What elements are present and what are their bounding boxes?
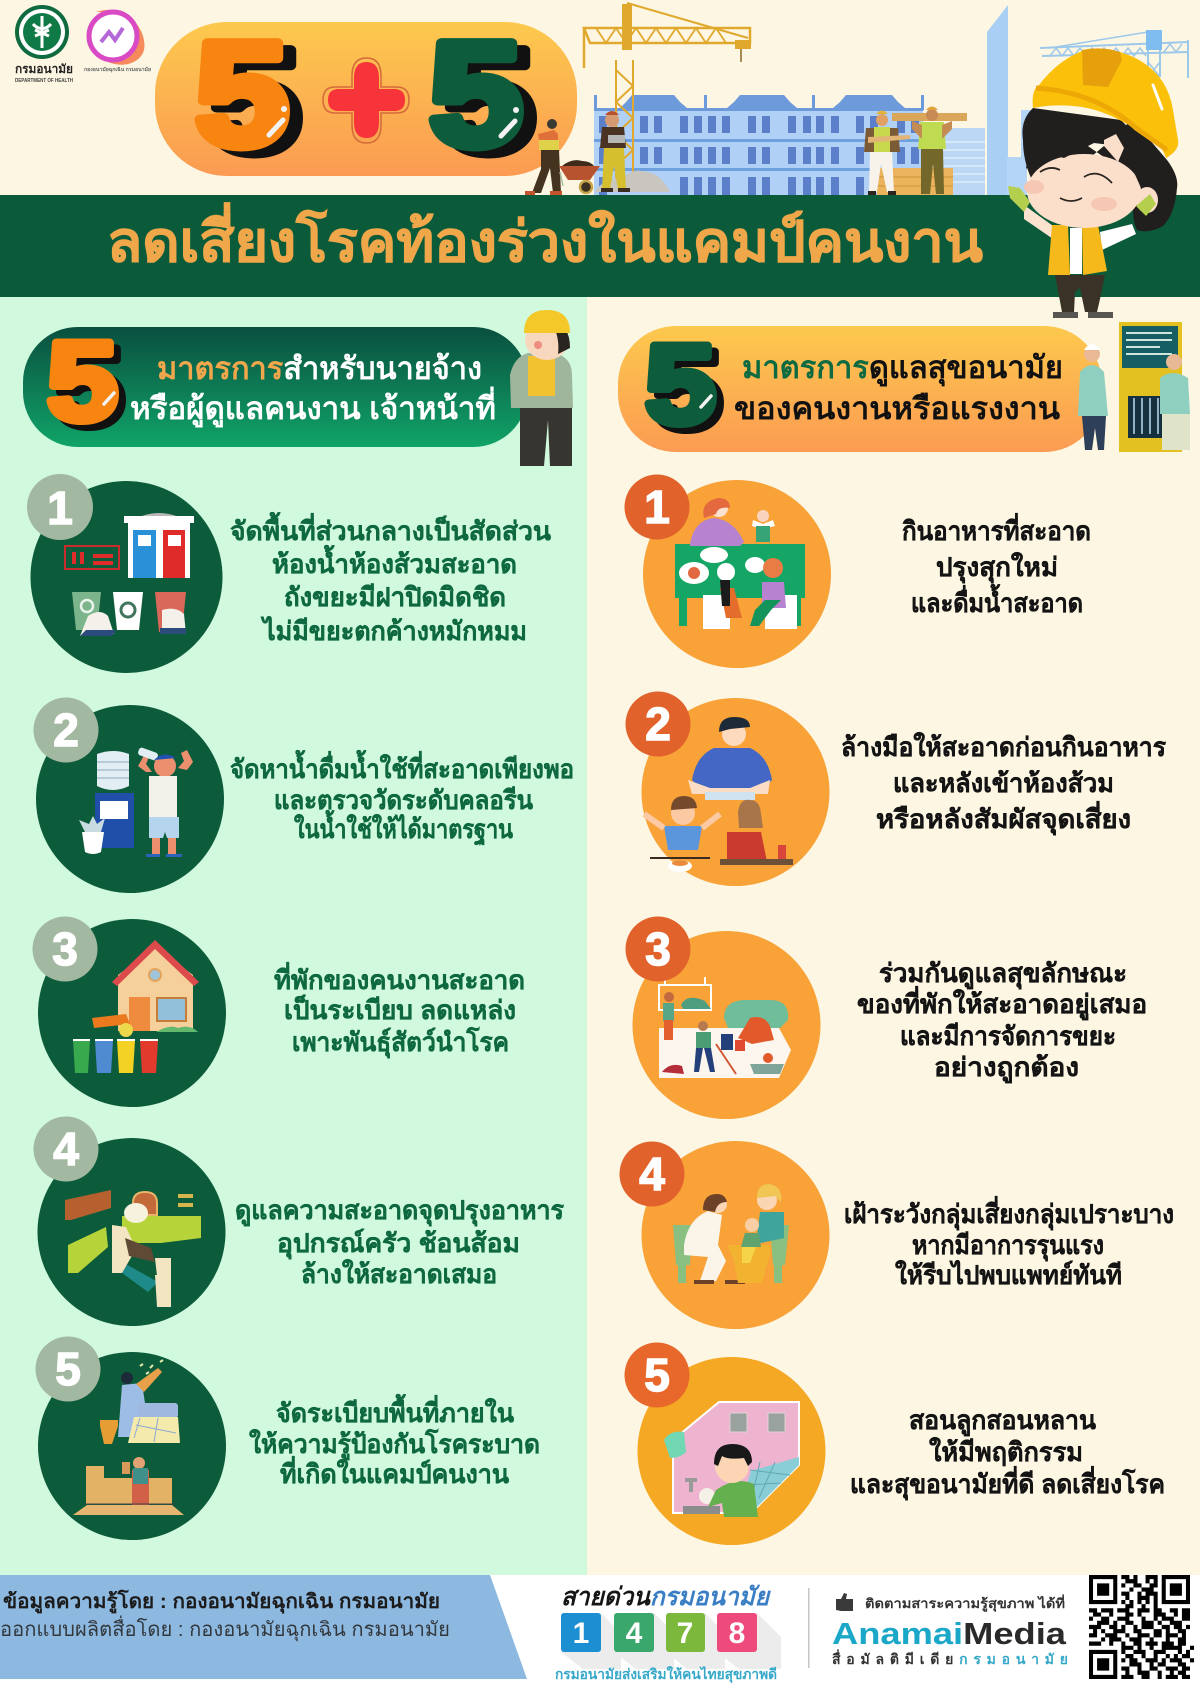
large orange 5: 5 xyxy=(47,319,118,444)
AnamaiMedia brand: สื่อมัลติมีเดีย กรมอนามัย xyxy=(832,1649,1068,1667)
text 3: ร่วมกันดูแลสุขลักษณะ xyxy=(879,958,1127,990)
big orange 5: 5 xyxy=(208,19,302,184)
text 4: อุปกรณ์ครัว ช้อนส้อม xyxy=(277,1228,520,1260)
item 1 xyxy=(27,474,551,673)
heading text: มาตรการสำหรับนายจ้าง xyxy=(157,351,482,386)
icon: doctor with mother and child xyxy=(673,1184,789,1284)
right light crane xyxy=(1040,30,1188,78)
text 2: และตรวจวัดระดับคลอรีน xyxy=(274,785,533,815)
panel: right column measures xyxy=(620,474,1174,1545)
footer xyxy=(0,1575,1194,1683)
text 4 xyxy=(844,1195,1174,1290)
panel heading: left column xyxy=(23,319,528,450)
heading text xyxy=(734,350,1063,426)
badge 5 xyxy=(36,1336,100,1402)
text 4: ให้รีบไปพบแพทย์ทันที xyxy=(895,1259,1122,1290)
hotline 1478: สายด่วนกรมอนามัย xyxy=(561,1583,771,1611)
item 5 xyxy=(36,1336,540,1540)
text 1: ห้องน้ำห้องส้วมสะอาด xyxy=(272,544,517,579)
badge 4: 4 xyxy=(639,1148,665,1200)
AnamaiMedia brand: ติดตามสาระความรู้สุขภาพ ได้ที่ xyxy=(865,1594,1065,1612)
text 4: หากมีอาการรุนแรง xyxy=(912,1230,1104,1262)
badge 2: 2 xyxy=(645,698,671,750)
text 4 xyxy=(235,1195,564,1289)
text 3 xyxy=(274,961,525,1059)
item 3 xyxy=(32,916,525,1107)
item 3 xyxy=(626,916,1147,1119)
text 5: และสุขอนามัยที่ดี ลดเสี่ยงโรค xyxy=(850,1465,1165,1501)
big green 5: 5 xyxy=(442,19,536,184)
badge 4 xyxy=(620,1142,684,1206)
badge 1 xyxy=(27,474,93,540)
pill: 5+5 headline xyxy=(155,12,577,184)
text 5: ที่เกิดในแคมป์คนงาน xyxy=(280,1455,509,1489)
background: construction scene xyxy=(584,3,1188,196)
text 1 xyxy=(230,511,551,646)
gloves xyxy=(1008,186,1030,212)
hotline 1478: 7 xyxy=(677,1617,693,1650)
small right block xyxy=(1007,110,1035,195)
panel heading: right column xyxy=(618,322,1102,453)
big character in hard hat xyxy=(1008,48,1178,318)
text 3 xyxy=(857,958,1147,1084)
icon: kitchen with chefs xyxy=(65,1190,201,1307)
plus sign xyxy=(323,58,409,143)
logo: Department of Health: กรมอนามัย xyxy=(15,62,73,76)
worker with wheelbarrow xyxy=(525,119,600,195)
icon: child washing hands xyxy=(664,1402,799,1517)
legs xyxy=(1055,275,1105,312)
badge 1 xyxy=(624,474,690,540)
badge 3: 3 xyxy=(645,923,671,975)
badge 4 xyxy=(34,1116,98,1182)
item 4 xyxy=(620,1141,1174,1329)
face xyxy=(1027,154,1141,228)
item 2 xyxy=(626,692,1166,886)
text 2: จัดหาน้ำดื่มน้ำใช้ที่สะอาดเพียงพอ xyxy=(230,749,574,784)
hotline 1478: 4 xyxy=(626,1617,643,1650)
bangs xyxy=(1026,108,1147,188)
icon: toilets and bins xyxy=(65,513,194,636)
title banner xyxy=(0,195,1200,297)
figure: supervisor with clipboard xyxy=(510,310,573,466)
workers carrying wood xyxy=(864,106,967,196)
item 2 xyxy=(34,698,574,893)
QR code xyxy=(1089,1575,1194,1679)
text 3: เพาะพันธุ์สัตว์นำโรค xyxy=(292,1026,509,1059)
text 2: ในน้ำใช้ให้ได้มาตรฐาน xyxy=(294,809,513,847)
item 5 xyxy=(624,1342,1165,1545)
text 1: และดื่มน้ำสะอาด xyxy=(911,583,1083,618)
credits block xyxy=(0,1575,527,1679)
badge 3 xyxy=(32,916,98,982)
icon: tidying bedroom and kitchen xyxy=(73,1360,184,1515)
badge 3 xyxy=(626,916,690,982)
heading text: ของคนงานหรือแรงงาน xyxy=(734,391,1060,426)
hotline 1478 xyxy=(555,1583,781,1683)
item 4 xyxy=(34,1116,564,1326)
text 1: ไม่มีขยะตกค้างหมักหมม xyxy=(260,615,527,646)
text 5: จัดระเบียบพื้นที่ภายใน xyxy=(276,1393,514,1428)
AnamaiMedia brand: Anamai Media xyxy=(832,1616,1067,1651)
text 4: ล้างให้สะอาดเสมอ xyxy=(301,1259,497,1289)
vest and shirt xyxy=(1048,225,1107,275)
text 1: ถังขยะมีฝาปิดมิดชิด xyxy=(284,582,506,612)
icon: family at table xyxy=(675,498,805,629)
text 5: ให้มีพฤติกรรม xyxy=(929,1437,1083,1467)
badge 2 xyxy=(626,692,690,756)
badge 5: 5 xyxy=(55,1343,81,1395)
logo: Department of Health: DEPARTMENT OF HEALTH xyxy=(15,78,73,84)
hotline 1478: กรมอนามัยส่งเสริมให้คนไทยสุขภาพดี xyxy=(555,1665,777,1683)
logo: health bureau swirl: กองอนามัยฉุกเฉิน กรมอนามัย xyxy=(84,66,151,73)
AnamaiMedia brand xyxy=(832,1593,1068,1667)
badge 2: 2 xyxy=(53,704,79,756)
icon: water cooler and man drinking xyxy=(79,747,193,857)
icon: house and recycling bins xyxy=(73,940,199,1073)
text 4: ดูแลความสะอาดจุดปรุงอาหาร xyxy=(235,1195,564,1227)
text 2: หรือหลังสัมผัสจุดเสี่ยง xyxy=(876,800,1131,836)
heading text xyxy=(130,351,496,428)
heading text: มาตรการดูแลสุขอนามัย xyxy=(742,350,1063,387)
worker with laptop xyxy=(600,111,630,192)
building xyxy=(594,95,924,195)
icon: family cleaning house xyxy=(659,977,791,1078)
text 2 xyxy=(230,749,574,847)
logo: health bureau swirl xyxy=(84,10,151,73)
text 5 xyxy=(850,1405,1165,1501)
sand pile xyxy=(595,171,670,192)
icon: handwashing and eating xyxy=(644,717,793,872)
heading text: หรือผู้ดูแลคนงาน เจ้าหน้าที่ xyxy=(130,386,496,428)
crane xyxy=(584,3,751,192)
badge 1: 1 xyxy=(47,482,73,534)
text 5: ให้ความรู้ป้องกันโรคระบาด xyxy=(249,1428,540,1461)
big orange 5: 5 xyxy=(195,12,289,177)
badge 3: 3 xyxy=(52,923,78,975)
text 3: เป็นระเบียบ ลดแหล่ง xyxy=(284,994,516,1025)
large green 5: 5 xyxy=(645,322,716,447)
hard hat xyxy=(1033,50,1178,158)
figure: workers at yellow machine xyxy=(1078,322,1190,452)
hotline 1478: 8 xyxy=(729,1617,745,1650)
badge 4: 4 xyxy=(53,1123,79,1175)
big green 5: 5 xyxy=(429,12,523,177)
large orange 5: 5 xyxy=(54,325,125,450)
text 5: สอนลูกสอนหลาน xyxy=(909,1405,1096,1437)
panel: left column measures xyxy=(27,474,574,1540)
text 1: จัดพื้นที่ส่วนกลางเป็นสัดส่วน xyxy=(230,511,551,546)
logo: Department of Health xyxy=(15,5,73,84)
credits block: ข้อมูลความรู้โดย : กองอนามัยฉุกเฉิน กรมอนามัย xyxy=(3,1589,440,1615)
tower right xyxy=(987,5,1008,195)
arms xyxy=(1024,205,1060,241)
text 2: ล้างมือให้สะอาดก่อนกินอาหาร xyxy=(841,732,1166,762)
hotline 1478: 1 xyxy=(573,1617,589,1650)
text 1: ปรุงสุกใหม่ xyxy=(936,552,1058,584)
text 2: และหลังเข้าห้องส้วม xyxy=(893,768,1114,798)
text 3: ของที่พักให้สะอาดอยู่เสมอ xyxy=(857,985,1147,1021)
panel: left column background xyxy=(0,297,587,1575)
text 3: และมีการจัดการขยะ xyxy=(900,1021,1116,1051)
item 1 xyxy=(624,474,1091,668)
hair back xyxy=(1022,108,1177,231)
text 4: เฝ้าระวังกลุ่มเสี่ยงกลุ่มเปราะบาง xyxy=(844,1195,1174,1231)
text 5 xyxy=(249,1393,540,1489)
badge 5 xyxy=(624,1342,690,1408)
large green 5: 5 xyxy=(652,328,723,453)
badge 5: 5 xyxy=(644,1349,670,1401)
badge 1: 1 xyxy=(644,481,670,533)
text 3: อย่างถูกต้อง xyxy=(934,1052,1079,1084)
text 1 xyxy=(902,512,1091,618)
background block xyxy=(943,128,985,195)
badge 2 xyxy=(34,698,98,762)
text 3: ที่พักของคนงานสะอาด xyxy=(274,961,525,995)
text 1: กินอาหารที่สะอาด xyxy=(902,512,1091,546)
credits block: ออกแบบผลิตสื่อโดย : กองอนามัยฉุกเฉิน กรมอนามัย xyxy=(0,1615,450,1642)
title banner: ลดเสี่ยงโรคท้องร่วงในแคมป์คนงาน xyxy=(107,202,983,273)
text 2 xyxy=(841,732,1166,836)
